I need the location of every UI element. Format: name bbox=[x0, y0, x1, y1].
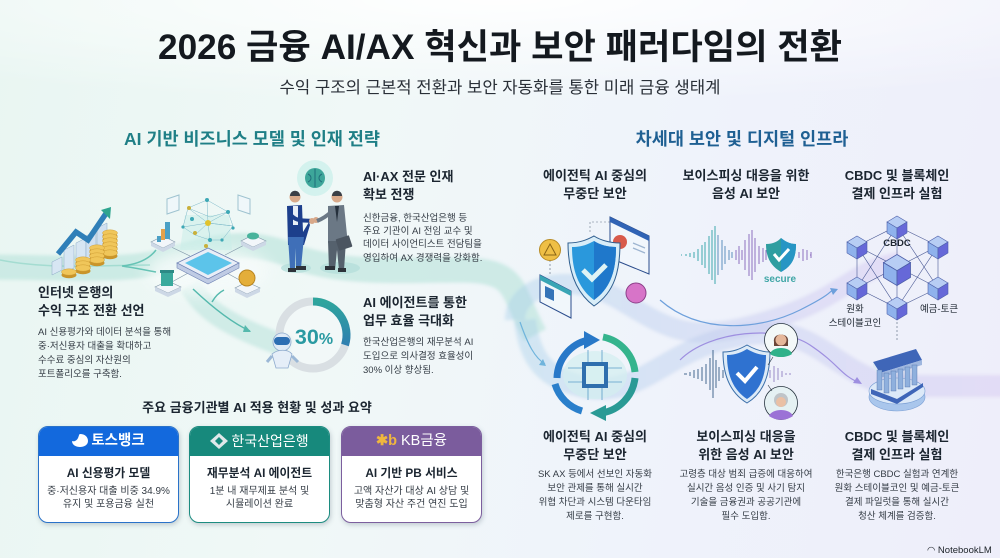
card: Toss Bank bbox=[38, 426, 179, 523]
card title: AI 신용평가 모델 bbox=[67, 466, 150, 480]
heading: right section: 차세대 보안 및 디지털 인프라 bbox=[636, 129, 848, 149]
NotebookLM watermark: ◠ NotebookLM bbox=[927, 545, 992, 556]
card header: Toss Bank: 토스뱅크 bbox=[91, 433, 145, 449]
heading: 에이전틱 AI 중심의 bbox=[543, 429, 647, 444]
body: 한국은행 CBDC 실험과 연계한 bbox=[836, 469, 958, 480]
icon: shield with alerts bbox=[540, 217, 649, 318]
label: 30 percent: 30% bbox=[295, 325, 333, 349]
card title: AI 기반 PB 서비스 bbox=[365, 466, 458, 480]
text block: col 1 bottom bbox=[538, 429, 652, 522]
card header: KDB bbox=[190, 427, 329, 456]
heading: col 3 top: CBDC 및 블록체인 bbox=[845, 168, 949, 183]
text block: col 2 bottom bbox=[680, 429, 812, 522]
title: 2026 금융 AI/AX 혁신과 보안 패러다임의 전환 bbox=[158, 28, 842, 67]
heading: AI talent bbox=[363, 169, 453, 202]
heading: 위한 음성 AI 보안 bbox=[698, 447, 794, 462]
icon: shield with people and waveform bbox=[684, 324, 798, 420]
card body: 고액 자산가 대상 AI 상담 및 bbox=[354, 486, 469, 497]
body: AI agent: 30% 이상 향상됨. bbox=[363, 365, 434, 376]
icon: CBDC blockchain network bbox=[847, 216, 948, 340]
heading: 무중단 보안 bbox=[563, 447, 627, 462]
body: AI talent: 데이터 사이언티스트 전담팀을 bbox=[363, 239, 482, 250]
body: AI agent: 도입으로 의사결정 효율성이 bbox=[363, 351, 473, 362]
heading: AI talent: 확보 전쟁 bbox=[363, 187, 414, 202]
heading: col 3 top: 결제 인프라 실험 bbox=[852, 186, 942, 201]
card body bbox=[354, 485, 469, 510]
card header: KB: ✱b KB금융 bbox=[376, 433, 447, 449]
heading: AI agent: AI 에이전트를 통한 bbox=[363, 295, 467, 310]
card: KDB bbox=[189, 426, 330, 523]
heading: internet bank bbox=[38, 285, 145, 318]
heading: internet bank: 수익 구조 전환 선언 bbox=[38, 303, 145, 318]
heading: col 2 top bbox=[683, 168, 810, 201]
heading: col 1 top: 에이전틱 AI 중심의 bbox=[543, 168, 647, 183]
body: internet bank: AI 신용평가와 데이터 분석을 통해 bbox=[38, 327, 171, 338]
icon: growth chart with coins bbox=[52, 207, 118, 278]
body: 고령층 대상 범죄 급증에 대응하여 bbox=[680, 469, 812, 480]
heading bbox=[845, 429, 949, 462]
text block: AI talent bbox=[363, 169, 482, 264]
body: AI talent bbox=[363, 212, 482, 264]
heading: col 1 top bbox=[543, 168, 647, 201]
body bbox=[680, 468, 812, 522]
icon: chip with circular arrows bbox=[555, 331, 635, 421]
heading: col 2 top: 보이스피싱 대응을 위한 bbox=[683, 168, 809, 183]
card body: 중·저신용자 대출 비중 34.9% bbox=[47, 486, 170, 497]
icon: business handshake and brain bbox=[281, 160, 360, 274]
icon: central bank building bbox=[869, 349, 925, 411]
heading: AI agent bbox=[363, 295, 467, 328]
body: 필수 도입함. bbox=[722, 511, 770, 522]
body bbox=[835, 468, 959, 522]
card title: 재무분석 AI 에이전트 bbox=[207, 466, 312, 480]
body: internet bank: 수수료 중심의 자산원의 bbox=[38, 355, 131, 366]
body: internet bank: 중·저신용자 대출을 확대하고 bbox=[38, 341, 151, 352]
heading: summary: 주요 금융기관별 AI 적용 현황 및 성과 요약 bbox=[142, 400, 372, 415]
heading: CBDC 및 블록체인 bbox=[845, 429, 949, 444]
body: 위협 차단과 시스템 다운타임 bbox=[539, 497, 651, 508]
body: AI talent: 신한금융, 한국산업은행 등 bbox=[363, 213, 467, 224]
card body bbox=[210, 485, 309, 510]
body: 청산 체계를 검증함. bbox=[858, 511, 936, 522]
body: AI talent: 주요 기관이 AI 전임 교수 및 bbox=[363, 226, 473, 237]
label: won stablecoin: 스테이블코인 bbox=[829, 318, 881, 329]
body: internet bank bbox=[38, 326, 171, 380]
card body bbox=[47, 485, 170, 510]
heading: internet bank: 인터넷 은행의 bbox=[38, 285, 113, 300]
label: CBDC: CBDC bbox=[883, 238, 911, 249]
heading: col 1 top: 무중단 보안 bbox=[563, 186, 627, 201]
heading: 보이스피싱 대응을 bbox=[696, 429, 796, 444]
icon: AI platform network bbox=[151, 195, 266, 298]
body: 실시간 음성 인증 및 사기 탐지 bbox=[687, 483, 805, 494]
card header: KDB: 한국산업은행 bbox=[231, 433, 309, 449]
body: 결제 파일럿을 통해 실시간 bbox=[845, 497, 949, 508]
card body: 맞춤형 자산 주건 연진 도입 bbox=[355, 499, 468, 510]
body: AI talent: 영입하여 AX 경쟁력을 강화함. bbox=[363, 253, 482, 264]
label: secure: secure bbox=[764, 274, 796, 285]
card header: KB bbox=[342, 427, 481, 456]
heading: col 3 top bbox=[845, 168, 949, 201]
heading bbox=[543, 429, 647, 462]
body: 원화 스테이블코인 및 예금-토큰 bbox=[835, 483, 959, 494]
body: 보안 관제를 통해 실시간 bbox=[547, 483, 643, 494]
text block: col 3 bottom bbox=[835, 429, 959, 522]
body: AI agent: 한국산업은행의 재무분석 AI bbox=[363, 337, 473, 348]
label: deposit token: 예금-토큰 bbox=[920, 304, 958, 315]
heading: 결제 인프라 실험 bbox=[852, 447, 942, 462]
body bbox=[538, 468, 652, 522]
heading: AI agent: 업무 효율 극대화 bbox=[363, 313, 454, 328]
body: SK AX 등에서 선보인 자동화 bbox=[538, 469, 652, 480]
body: internet bank: 포트폴리오를 구축함. bbox=[38, 369, 122, 380]
card body: 1분 내 재무제표 분석 및 bbox=[210, 486, 309, 497]
label: won stablecoin bbox=[829, 304, 881, 329]
heading: AI talent: AI·AX 전문 인재 bbox=[363, 169, 453, 184]
label: won stablecoin: 원화 bbox=[846, 304, 864, 315]
chart: 30% donut and robot bbox=[267, 301, 347, 368]
card header: Toss Bank bbox=[39, 427, 178, 456]
body: AI agent bbox=[363, 336, 473, 376]
icon: voice waveform with secure shield bbox=[681, 226, 811, 284]
body: 제로를 구현함. bbox=[566, 511, 624, 522]
subtitle: 수익 구조의 근본적 전환과 보안 자동화를 통한 미래 금융 생태계 bbox=[280, 78, 720, 97]
card body: 시뮬레이션 완료 bbox=[226, 499, 293, 510]
text block: AI agent bbox=[363, 295, 473, 376]
heading bbox=[696, 429, 796, 462]
text block: internet bank bbox=[38, 285, 171, 380]
card: KB bbox=[341, 426, 482, 523]
card body: 유지 및 포용금융 실천 bbox=[63, 499, 154, 510]
heading: left section: AI 기반 비즈니스 모델 및 인재 전략 bbox=[124, 129, 380, 149]
body: 기술을 금융권과 공공기관에 bbox=[691, 497, 801, 508]
heading: col 2 top: 음성 AI 보안 bbox=[712, 186, 780, 201]
